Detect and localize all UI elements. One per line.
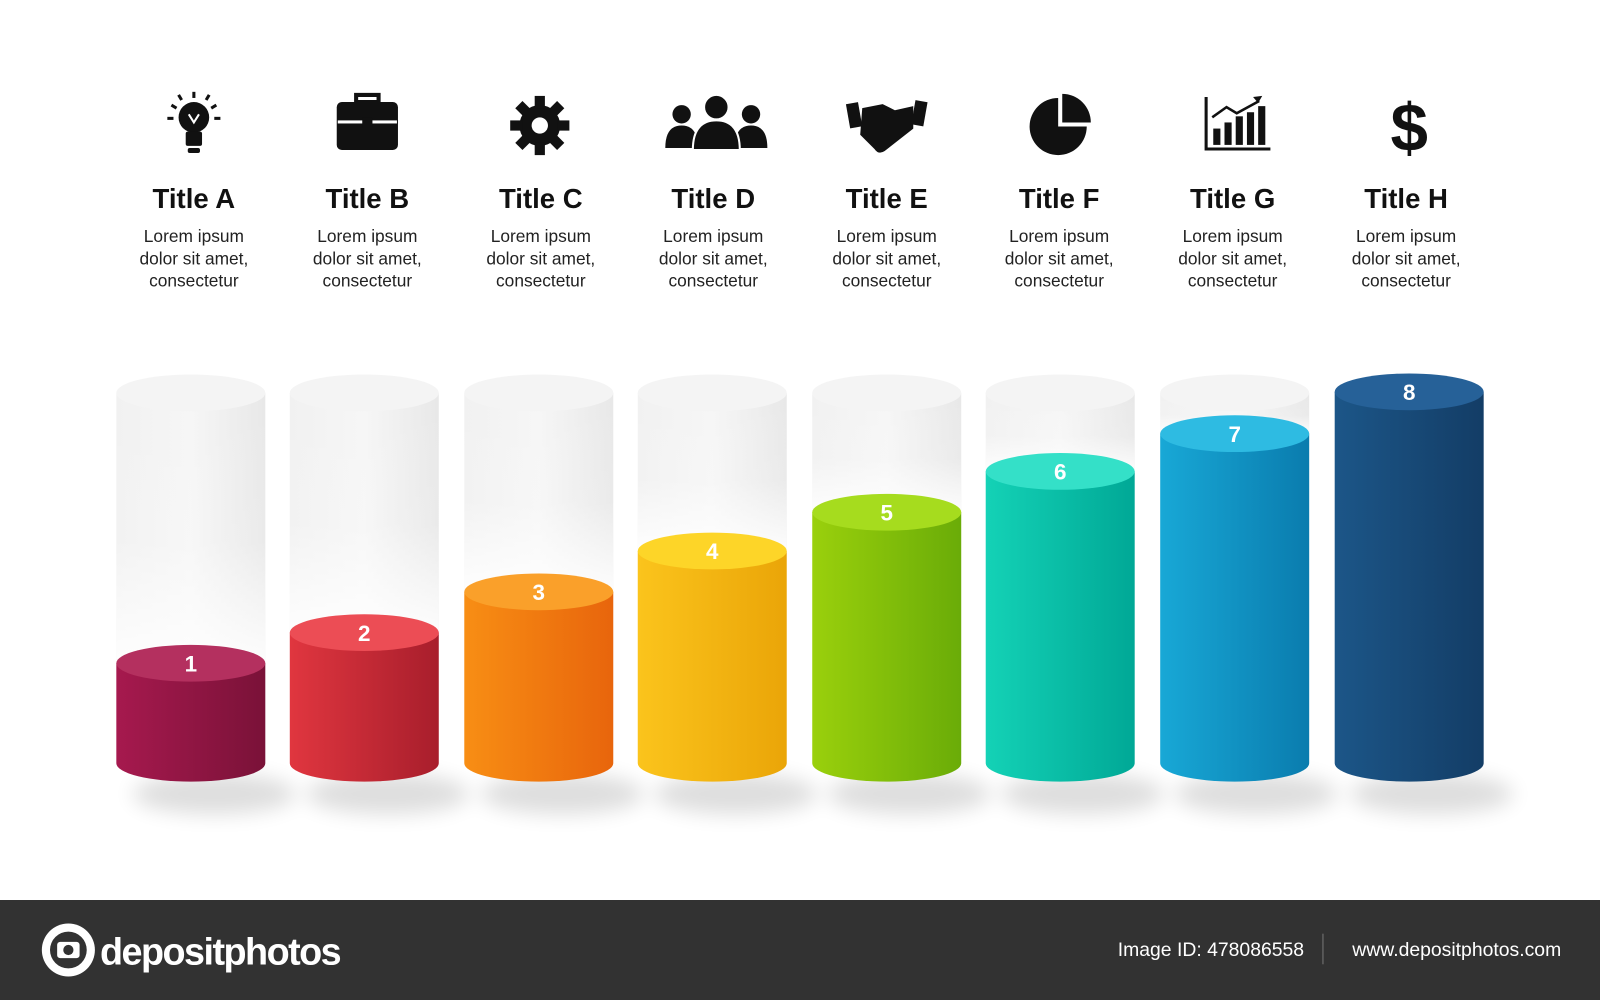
bar 7	[1160, 415, 1309, 782]
titles: Title G	[1190, 183, 1275, 214]
titles	[153, 183, 1448, 214]
bar 7: 7	[1228, 422, 1241, 447]
bar 3: 3	[533, 580, 545, 605]
bar 6	[986, 453, 1135, 782]
descriptions: consectetur	[668, 271, 758, 291]
icon: gear	[498, 84, 582, 167]
descriptions: dolor sit amet,	[1352, 248, 1461, 268]
descriptions	[139, 226, 1461, 291]
descriptions: dolor sit amet,	[832, 248, 941, 268]
titles: Title F	[1019, 183, 1099, 214]
descriptions: Lorem ipsum	[1183, 226, 1283, 246]
descriptions: Lorem ipsum	[837, 226, 937, 246]
descriptions: consectetur	[323, 271, 412, 291]
bar 1	[116, 645, 265, 782]
column 5	[812, 374, 961, 782]
icon: bar chart	[1206, 96, 1270, 149]
bar 4: 4	[706, 539, 719, 564]
descriptions: Lorem ipsum	[663, 226, 763, 246]
titles: Title D	[671, 183, 755, 214]
descriptions: consectetur	[842, 271, 932, 291]
descriptions: consectetur	[1188, 271, 1278, 291]
icon: light bulb	[167, 92, 220, 153]
descriptions: dolor sit amet,	[486, 248, 595, 268]
footer bar	[0, 900, 1600, 1000]
logo	[42, 923, 341, 977]
logo: depositphotos	[100, 930, 341, 972]
bar 2: 2	[358, 621, 371, 646]
descriptions: consectetur	[149, 271, 239, 291]
column 6	[986, 374, 1135, 782]
descriptions: Lorem ipsum	[317, 226, 417, 246]
bar 8: 8	[1403, 380, 1415, 405]
ghost cylinder 1	[116, 374, 265, 663]
bar 8	[1335, 373, 1484, 782]
descriptions: Lorem ipsum	[144, 226, 244, 246]
descriptions: dolor sit amet,	[1005, 248, 1114, 268]
bar 3	[464, 573, 613, 782]
titles: Title B	[326, 183, 409, 214]
image id: Image ID: 478086558	[1118, 939, 1304, 961]
icon: handshake	[846, 100, 928, 153]
icon: dollar: $	[1390, 91, 1428, 166]
bar 5	[812, 494, 961, 782]
descriptions: consectetur	[1014, 271, 1104, 291]
icon: people	[665, 95, 767, 150]
website: www.depositphotos.com	[1351, 939, 1561, 961]
column 3	[464, 374, 613, 782]
descriptions: dolor sit amet,	[313, 248, 422, 268]
descriptions: dolor sit amet,	[139, 248, 248, 268]
column 2	[290, 374, 439, 782]
column 4	[638, 374, 787, 782]
icon: briefcase	[337, 95, 398, 150]
bar 5: 5	[880, 500, 893, 525]
descriptions: Lorem ipsum	[1009, 226, 1109, 246]
descriptions: Lorem ipsum	[1356, 226, 1456, 246]
descriptions: dolor sit amet,	[659, 248, 768, 268]
titles: Title E	[846, 183, 928, 214]
column 7	[1160, 374, 1309, 782]
shadows	[133, 773, 1513, 814]
icon: pie chart	[1030, 94, 1091, 155]
descriptions: consectetur	[496, 271, 586, 291]
bar 4	[638, 533, 787, 782]
bar 6: 6	[1054, 460, 1066, 485]
titles: Title C	[499, 183, 583, 214]
descriptions: consectetur	[1361, 271, 1451, 291]
descriptions: Lorem ipsum	[491, 226, 591, 246]
titles: Title H	[1364, 183, 1448, 214]
bar 2	[290, 614, 439, 782]
titles: Title A	[153, 183, 235, 214]
column 1	[116, 374, 265, 782]
bar 1: 1	[185, 651, 197, 676]
descriptions: dolor sit amet,	[1178, 248, 1287, 268]
